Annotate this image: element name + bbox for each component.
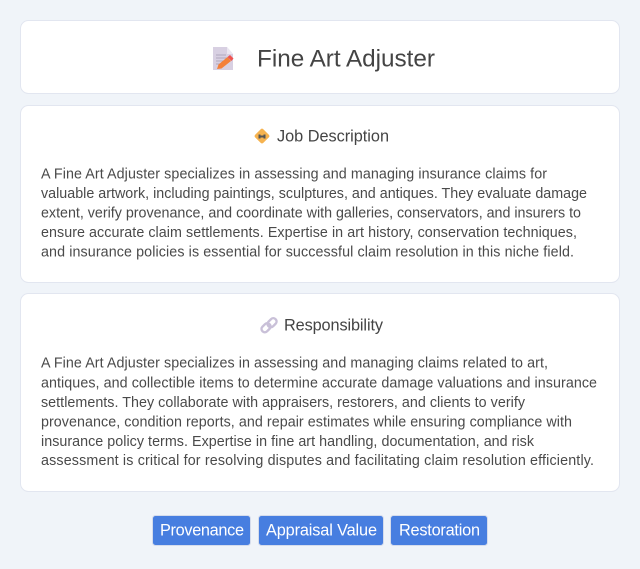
panel: title header xyxy=(20,20,620,94)
text block: responsibility xyxy=(41,356,597,469)
tag: provenance: Provenance xyxy=(160,522,244,540)
heading: responsibility: Responsibility xyxy=(284,316,384,334)
tag: appraisal value xyxy=(258,516,384,546)
text block: job description xyxy=(41,166,587,260)
tag: restoration: Restoration xyxy=(399,522,480,540)
tag: restoration xyxy=(390,516,488,546)
title: Fine Art Adjuster xyxy=(257,46,435,72)
text block: responsibility: antiques, and collectible items to determine accurate damage valuations and insurance xyxy=(41,376,597,392)
icon: document with pencil xyxy=(213,47,234,70)
text block: responsibility: settlements. They collaborate with appraisers, restorers, and clients to verify xyxy=(41,395,526,411)
text block: job description: and insurance policies is essential for successful claim resolution in this niche field. xyxy=(41,244,574,260)
panel: responsibility xyxy=(20,294,620,492)
text block: responsibility: insurance policy terms. Expertise in fine art handling, documentation, and risk xyxy=(41,434,535,450)
text block: responsibility: assessment is critical for resolving disputes and facilitating claim resolution efficiently. xyxy=(41,453,594,469)
icon: diamond sign xyxy=(254,128,270,144)
icon: chain link xyxy=(260,317,278,334)
tag: appraisal value: Appraisal Value xyxy=(266,522,377,540)
text block: job description: ensure accurate claim settlements. Expertise in art history, conservation techniques, xyxy=(41,225,577,241)
text block: job description: extent, verify provenance, and coordinate with galleries, conservators, and insurers to xyxy=(41,206,581,222)
tag: provenance xyxy=(152,516,250,546)
text block: responsibility: provenance, condition reports, and repair estimates while ensuring compliance with xyxy=(41,414,572,430)
text block: responsibility: A Fine Art Adjuster specializes in assessing and managing claims related to art, xyxy=(41,356,548,372)
text block: job description: A Fine Art Adjuster specializes in assessing and managing insurance claims for xyxy=(41,166,547,182)
panel: job description xyxy=(20,106,620,282)
heading: job description: Job Description xyxy=(277,128,389,146)
text block: job description: valuable artwork, including paintings, sculptures, and antiques. They evaluate damage xyxy=(41,186,587,202)
